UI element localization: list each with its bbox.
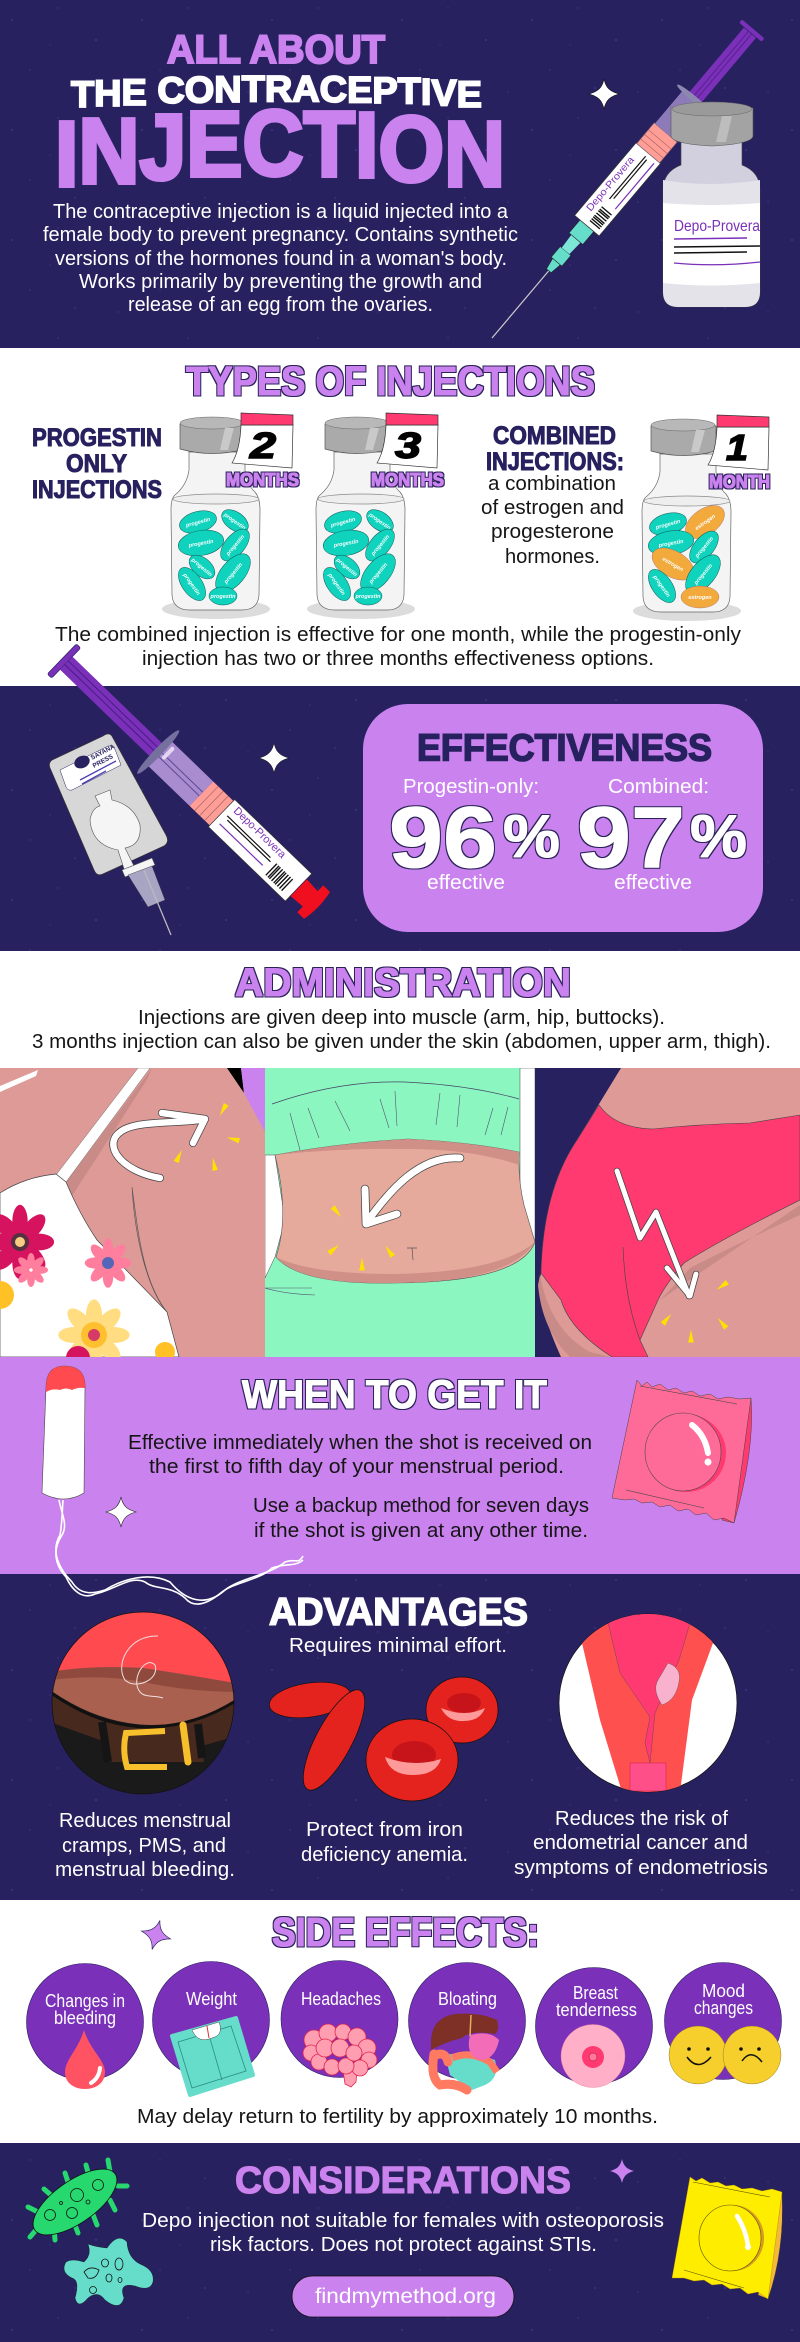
timing text: if the shot is given at any other time.	[254, 1520, 588, 1542]
icon: yellow condom packet	[672, 2177, 782, 2299]
side effect: bloating: Bloating	[438, 1989, 497, 2009]
intro text: female body to prevent pregnancy. Contains synthetic	[43, 224, 518, 246]
heading: advantages: ADVANTAGES	[269, 1591, 528, 1634]
button: website	[292, 2276, 514, 2317]
side effects note: May delay return to fertility by approximately 10 months.	[137, 2106, 658, 2128]
combined text: INJECTIONS:	[486, 448, 624, 476]
bottle: 2 months	[162, 413, 299, 619]
side effect: mood changes	[664, 1962, 782, 2084]
side effect: changes in bleeding: bleeding	[54, 2008, 116, 2028]
advantage captions: menstrual bleeding.	[55, 1859, 235, 1881]
vial label	[674, 218, 760, 265]
icon: Sayana Press device	[49, 734, 171, 935]
side effect: breast tenderness	[536, 1968, 652, 2088]
bottle: 1 month: progestin	[694, 536, 716, 560]
heading: considerations: CONSIDERATIONS	[235, 2160, 571, 2202]
illustration: arm injection site	[0, 1068, 265, 1371]
panel: when to get it	[0, 1357, 800, 1604]
combined text: a combination	[488, 473, 616, 495]
advantage captions: endometrial cancer and	[533, 1832, 748, 1854]
side effect: breast tenderness: Breast	[573, 1983, 618, 2003]
bottle: 1 month: progestin	[693, 563, 715, 587]
timing text: Effective immediately when the shot is received on	[128, 1432, 592, 1454]
intro text: release of an egg from the ovaries.	[128, 294, 433, 316]
vial label: Depo-Provera	[674, 218, 760, 235]
types summary: injection has two or three months effectiveness options.	[142, 648, 654, 670]
panel: administration	[0, 951, 800, 1068]
icon: syringe with red cap	[41, 637, 339, 928]
advantage captions: Reduces menstrual	[59, 1810, 231, 1832]
icon: sparkle	[106, 1497, 136, 1527]
icon: vial	[663, 102, 760, 307]
icon: sad face	[723, 2026, 781, 2084]
icon: Sayana Press device: SAYANA	[90, 743, 116, 762]
button: website: findmymethod.org	[315, 2285, 496, 2308]
title	[55, 28, 505, 206]
icon: uterus	[559, 1610, 737, 1792]
timing text: the first to fifth day of your menstrual period.	[149, 1456, 564, 1478]
panel: types of injections	[0, 348, 800, 686]
panel: considerations	[0, 2143, 800, 2342]
side effect: headaches: Headaches	[301, 1989, 381, 2009]
icon: sparkle	[589, 79, 619, 109]
icon: teal amoeba	[64, 2238, 153, 2306]
bottle: 1 month: progestin	[657, 539, 685, 549]
combined text: progesterone	[491, 521, 614, 543]
side effect: weight: Weight	[186, 1989, 237, 2009]
stat: progestin-only 96%	[389, 776, 560, 894]
bottle: 2 months: MONTHS	[226, 470, 299, 490]
intro text: Works primarily by preventing the growth and	[79, 271, 482, 293]
intro text: versions of the hormones found in a woman's body.	[55, 248, 507, 270]
advantage captions: deficiency anemia.	[301, 1844, 468, 1866]
bottle: 1 month: 1	[726, 427, 748, 468]
panel: intro	[0, 0, 800, 352]
administration text	[32, 1007, 771, 1053]
heading: side effects: SIDE EFFECTS:	[272, 1909, 539, 1955]
stat: combined 97%: Combined:	[608, 776, 709, 798]
illustration: buttock injection site	[535, 1068, 800, 1357]
icon: syringe: Depo-Provera	[585, 154, 637, 214]
title: THE CONTRACEPTIVE	[71, 68, 482, 115]
advantage captions: cramps, PMS, and	[62, 1835, 226, 1857]
panel: effectiveness	[0, 637, 800, 951]
dress	[0, 1174, 179, 1357]
bottle: 1 month: estrogen	[661, 556, 685, 574]
timing text: Use a backup method for seven days	[253, 1495, 589, 1517]
icon: red blood cells	[267, 1677, 498, 1801]
bottle: 1 month: progestin	[654, 519, 682, 531]
icon: sparkle	[259, 743, 289, 773]
intro text	[43, 201, 518, 316]
side effect: headaches	[281, 1960, 398, 2087]
title: INJECTION	[55, 91, 505, 206]
stat: combined 97%: 97	[577, 790, 685, 886]
bottle: 3 months: 3	[395, 425, 421, 466]
arrow	[113, 1113, 205, 1178]
bottle: 1 month: estrogen	[694, 513, 717, 532]
combined text: of estrogen and	[481, 497, 624, 519]
icon: condom packet	[612, 1380, 752, 1523]
heading: administration: ADMINISTRATION	[235, 961, 571, 1005]
bottle: 3 months	[307, 413, 444, 619]
side effect: changes in bleeding: Changes in	[45, 1991, 125, 2011]
advantage captions: symptoms of endometriosis	[514, 1857, 768, 1879]
stat: progestin-only 96%: effective	[427, 872, 505, 894]
illustration: abdomen injection site	[265, 1068, 535, 1357]
advantage captions: Protect from iron	[306, 1819, 463, 1841]
advantage captions: Reduces the risk of	[555, 1808, 728, 1830]
progestin label: INJECTIONS	[32, 476, 162, 504]
icon: waist with belt	[50, 1610, 240, 1800]
side effect: breast tenderness: tenderness	[556, 2000, 637, 2020]
administration text: 3 months injection can also be given under the skin (abdomen, upper arm, thigh).	[32, 1031, 771, 1053]
stat: progestin-only 96%: 96	[389, 790, 497, 886]
title: ALL ABOUT	[167, 28, 385, 72]
side effect: bloating	[408, 1962, 526, 2090]
stat: combined 97%: effective	[614, 872, 692, 894]
icon: Sayana Press device: PRESS	[92, 753, 115, 770]
bottle: 3 months: MONTHS	[371, 470, 444, 490]
heading: when to get it: WHEN TO GET IT	[242, 1373, 547, 1417]
side effect: mood changes: changes	[694, 1998, 753, 2018]
advantages intro: Requires minimal effort.	[289, 1635, 507, 1657]
panel: advantages	[0, 1574, 800, 1900]
bottle: 1 month: estrogen	[688, 595, 712, 601]
combined text	[481, 422, 624, 568]
stat: progestin-only 96%: %	[503, 803, 560, 870]
icon: happy face	[669, 2026, 727, 2084]
considerations text: risk factors. Does not protect against STIs.	[210, 2234, 597, 2256]
stat: combined 97%	[577, 776, 747, 894]
administration text: Injections are given deep into muscle (arm, hip, buttocks).	[138, 1007, 665, 1029]
side effect: weight	[152, 1962, 270, 2095]
considerations text	[142, 2210, 664, 2256]
progestin label	[32, 424, 162, 504]
bottle: 2 months: 2	[249, 425, 276, 466]
bottle: 1 month: MONTH	[709, 472, 770, 492]
side effect: changes in bleeding	[26, 1964, 144, 2089]
advantage captions	[55, 1808, 768, 1881]
intro text: The contraceptive injection is a liquid injected into a	[53, 201, 509, 223]
icon: sparkle	[138, 1917, 174, 1953]
heading: effectiveness: EFFECTIVENESS	[417, 728, 712, 770]
icon: tampon	[42, 1366, 303, 1604]
combined text: hormones.	[505, 546, 600, 568]
bottle: 1 month: progestin	[651, 574, 671, 599]
icon: syringe with red cap: Depo-Provera	[231, 805, 289, 862]
stat: combined 97%: %	[690, 803, 747, 870]
icon: green bacterium	[23, 2157, 127, 2247]
considerations text: Depo injection not suitable for females with osteoporosis	[142, 2210, 664, 2232]
icon: sparkle	[610, 2159, 634, 2183]
stat: progestin-only 96%: Progestin-only:	[403, 776, 539, 798]
progestin label: ONLY	[66, 450, 127, 478]
timing text	[128, 1432, 592, 1542]
progestin label: PROGESTIN	[32, 424, 162, 452]
card: effectiveness	[363, 704, 763, 932]
types summary	[55, 624, 741, 670]
panel: side effects	[0, 1900, 800, 2143]
heading: types of injections: TYPES OF INJECTIONS	[186, 358, 595, 404]
icon: syringe	[475, 14, 770, 352]
types summary: The combined injection is effective for one month, while the progestin-only	[55, 624, 741, 646]
bottle: 1 month	[633, 415, 770, 621]
side effect: mood changes: Mood	[702, 1981, 745, 2001]
arrow	[365, 1158, 460, 1224]
arrow	[617, 1171, 696, 1296]
combined text: COMBINED	[493, 422, 616, 450]
